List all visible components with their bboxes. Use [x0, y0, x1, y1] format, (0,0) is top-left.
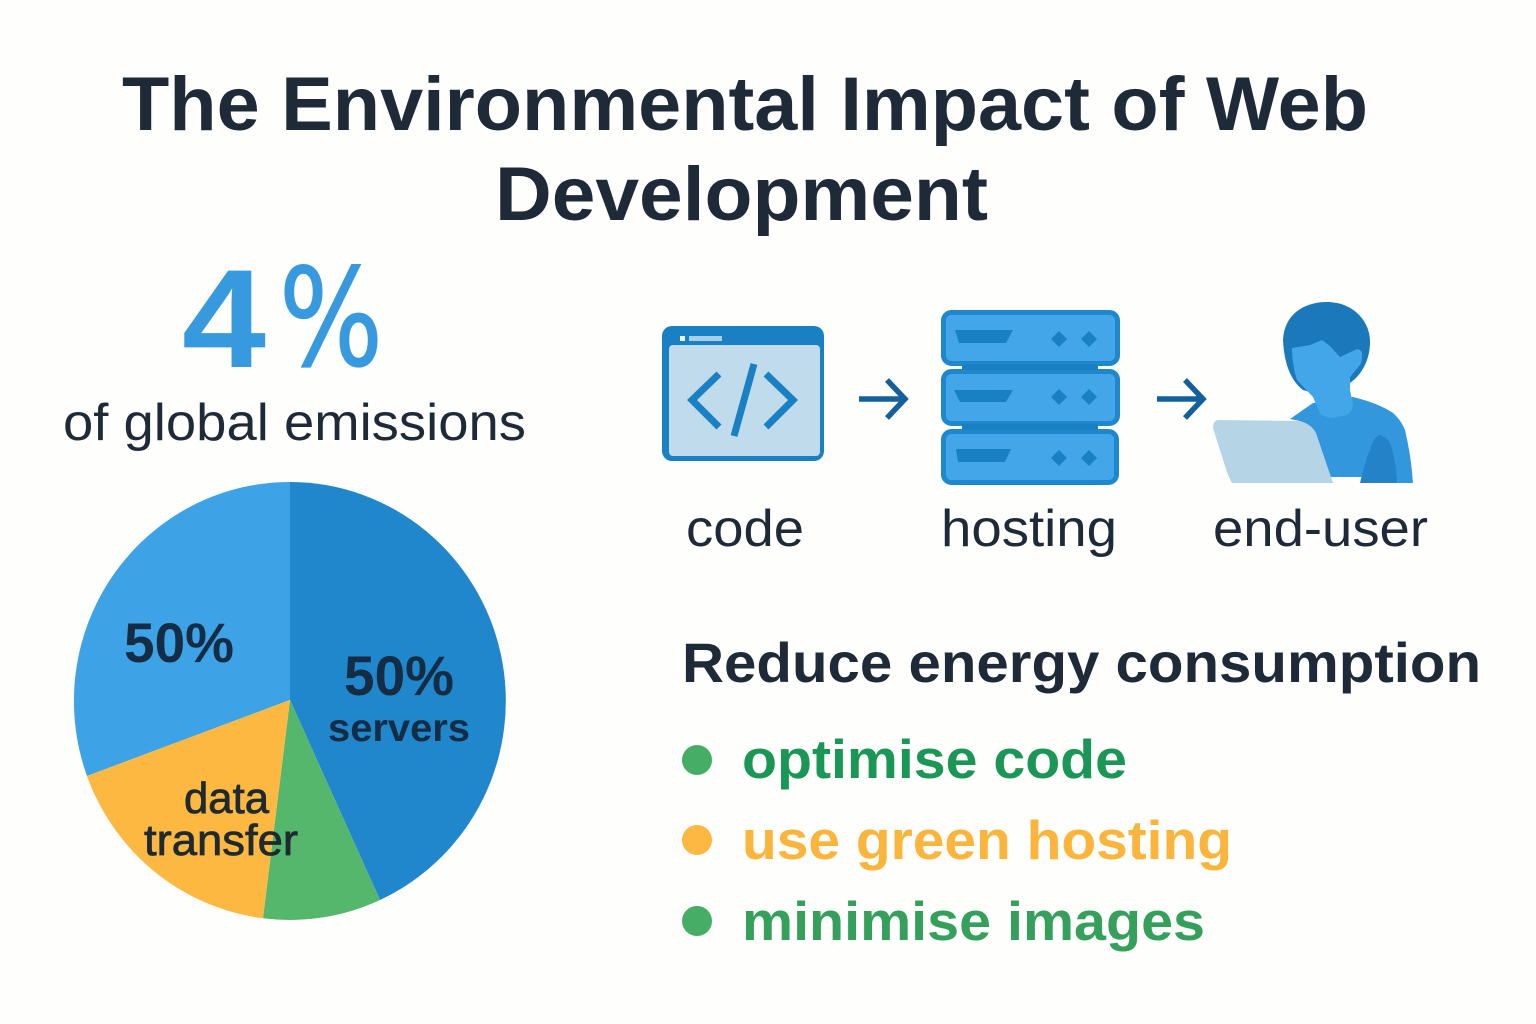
laptop: [1213, 420, 1333, 483]
stat number: 4: [182, 240, 266, 397]
label: data transfer: transfer: [144, 816, 298, 865]
label: 50% left: 50%: [124, 611, 234, 674]
label: data transfer: [144, 774, 298, 865]
item: minimise images: minimise images: [742, 890, 1205, 952]
pipeline labels: code: [686, 500, 804, 558]
slice: data transfer: [87, 700, 290, 918]
title: [122, 62, 1368, 237]
heading: reduce energy consumption: Reduce energy consumption: [682, 631, 1481, 694]
pipeline labels: [686, 500, 1428, 558]
pie chart: emissions breakdown: [74, 482, 506, 920]
arrow: hosting to end-user: [1157, 380, 1203, 418]
item: optimise code: optimise code: [742, 728, 1127, 790]
slice: green: [263, 700, 380, 920]
title: The Environmental Impact of Web: [122, 62, 1368, 147]
stat number: %: [279, 240, 383, 397]
item: use green hosting: use green hosting: [742, 809, 1232, 871]
arrow: code to hosting: [859, 380, 905, 418]
slice: servers 50%: [290, 482, 506, 900]
pipeline labels: end-user: [1213, 500, 1428, 558]
headline statistic: 4% of global emissions: [63, 240, 526, 452]
pipeline labels: hosting: [941, 500, 1117, 558]
body: [1290, 397, 1413, 483]
icon: end-user at laptop: [1213, 302, 1413, 483]
label: 50% servers: [328, 644, 470, 750]
stat caption: of global emissions: [63, 394, 526, 452]
face and neck: [1292, 340, 1362, 418]
slice: end-user 50%: [74, 482, 290, 776]
icon: code window: [662, 326, 824, 461]
label: data transfer: data: [184, 774, 270, 823]
hair: [1283, 302, 1370, 395]
label: 50% servers: servers: [328, 707, 470, 750]
label: 50% servers: 50%: [344, 644, 454, 707]
stat number: [182, 240, 383, 397]
list: reduction actions: [682, 728, 1232, 952]
icon: server stack: [944, 312, 1118, 482]
title: Development: [495, 152, 988, 237]
shirt fold: [1360, 435, 1397, 483]
